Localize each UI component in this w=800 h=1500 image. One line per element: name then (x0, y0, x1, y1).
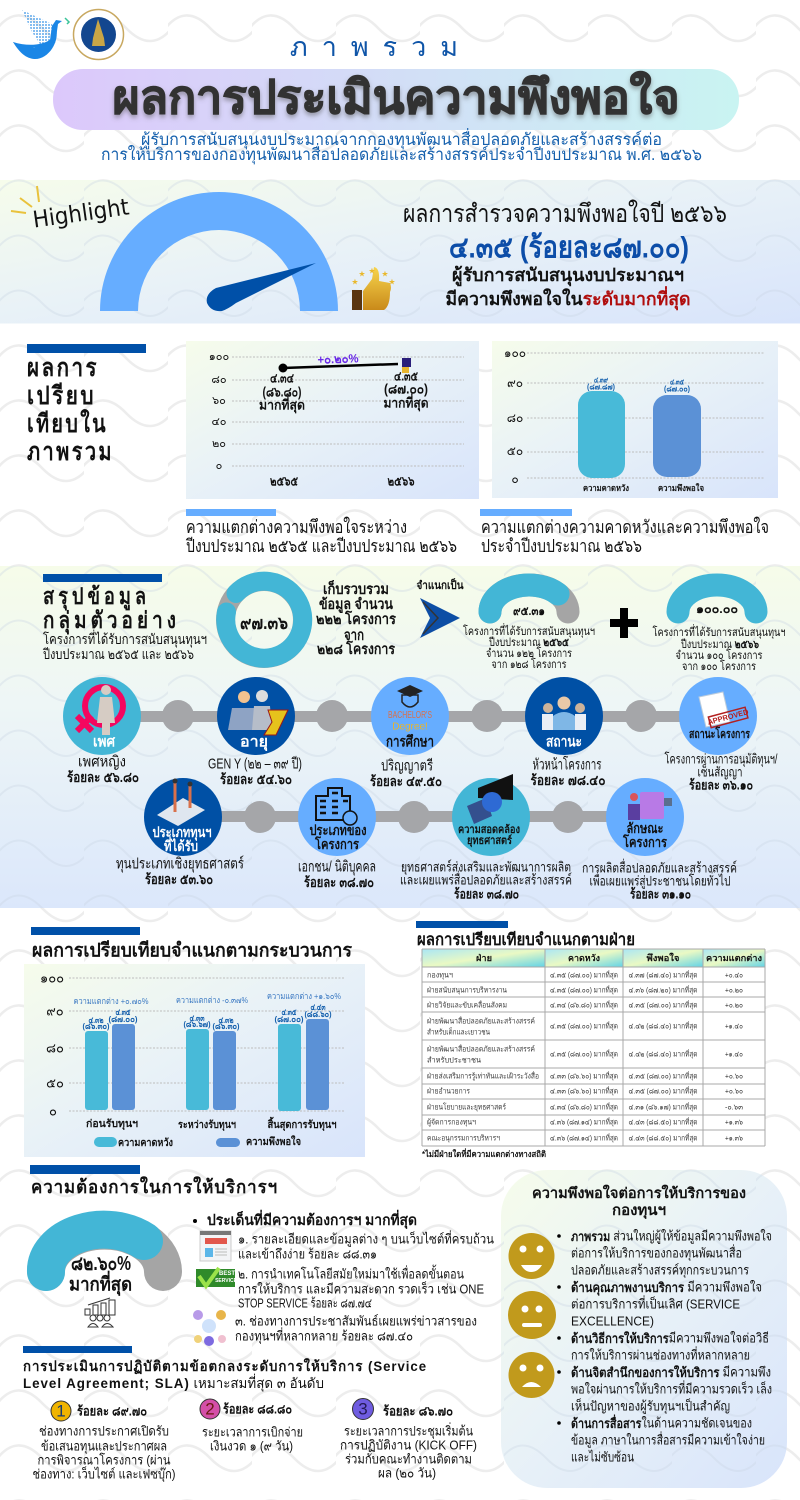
list: most needed issues: ประเด็นที่มีความต้องการฯ มากที่สุด (207, 1209, 417, 1229)
circle: project type: โครงการ (314, 835, 359, 852)
text: need 2 (238, 1264, 484, 1310)
bar chart: expectation vs satisfaction: (๘๗.๘๗) (587, 382, 615, 392)
table: by division: ความแตกต่าง (706, 953, 762, 963)
text: fiscal 2565: จำนวน ๑๒๒ โครงการ (486, 646, 572, 660)
list: service method (557, 1330, 769, 1362)
table: by division: ฝ่ายส่งเสริมการรู้เท่าทันและเฝ้าระวังสื่อ (427, 1070, 539, 1080)
table: by division: +๐.๒๐ (725, 986, 743, 994)
circle: project nature: ลักษณะ (626, 820, 664, 836)
table: by division: ฝ่าย (476, 953, 492, 963)
bar chart: by process: ๔.๔๓ (310, 1002, 326, 1012)
bar chart: expectation vs satisfaction: ๔.๓๙ (594, 376, 608, 384)
line chart: year comparison: ๐ (216, 460, 222, 472)
caption: expectation difference (480, 509, 769, 556)
circle: status: สถานะ (546, 734, 582, 750)
table: by division: ๔.๔๓ (๘๘.๕๐) มากที่สุด (628, 1132, 698, 1142)
line chart: year comparison: ๑๐๐ (209, 351, 229, 363)
footnote: *ไม่มีฝ่ายใดที่มีความแตกต่างทางสถิติ (422, 1147, 546, 1159)
bar chart: expectation vs satisfaction: ๑๐๐ (504, 346, 526, 360)
bar chart: by process: ๙๐ (46, 1004, 64, 1018)
table: by division: คณะอนุกรรมการบริหารฯ (427, 1134, 500, 1142)
icon: best service: SERVICE (215, 1278, 238, 1284)
list: service method: การให้บริการผ่านช่องทางที่หลากหลาย (571, 1346, 750, 1362)
text: need 3 (235, 1314, 477, 1344)
table: by division: ๔.๓๕ (๘๗.๐๐) มากที่สุด (628, 1070, 698, 1080)
line chart: year comparison: ๒๐ (212, 438, 226, 450)
list: service method: ด้านวิธีการให้บริการมีความพึงพอใจต่อวิธี (571, 1330, 769, 1346)
bar chart: expectation vs satisfaction: ความพึงพอใจ (658, 483, 704, 493)
list: service quality: EXCELLENCE) (571, 1314, 654, 1328)
result: project status: เซ็นสัญญา (698, 762, 742, 780)
donut: response rate: ๙๗.๓๖ (240, 613, 288, 633)
circle: project nature: โครงการ (622, 833, 667, 850)
result: project type: ร้อยละ ๓๘.๗๐ (304, 874, 374, 890)
text: sample count: ข้อมูล จำนวน (319, 596, 393, 613)
list: communication: และไม่ซับซ้อน (571, 1450, 634, 1464)
text: fiscal 2566: จาก ๑๐๐ โครงการ (682, 659, 756, 673)
bar chart: expectation vs satisfaction: ๘๐ (507, 411, 523, 425)
circle: strategy alignment: ยุทธศาสตร์ (467, 834, 512, 848)
line chart: year comparison: ๖๐ (212, 395, 226, 407)
legend (94, 1134, 301, 1149)
result: status (530, 756, 606, 788)
result: project type: เอกชน/ นิติบุคคล (298, 858, 376, 876)
table: by division: ๔.๔๓ (๘๘.๕๐) มากที่สุด (628, 1116, 698, 1126)
bar chart: by process: (๘๗.๐๐) (108, 1014, 138, 1024)
main title banner: ผลการประเมินความพึงพอใจ (112, 70, 680, 123)
table: by division: ฝ่ายพัฒนาสื่อปลอดภัยและสร้างสรรค์ (427, 1016, 535, 1026)
heading: sample summary: ปีงบประมาณ ๒๕๖๕ และ ๒๕๖๖ (43, 646, 194, 662)
circle: grant type (144, 778, 222, 856)
icon: best service: BEST (219, 1271, 235, 1277)
gauge: service needs: มากที่สุด (69, 1270, 132, 1296)
bar chart: by process: (๘๘.๖๐) (304, 1009, 332, 1019)
table: by division: +๐.๒๐ (725, 1000, 743, 1010)
bar chart: by process: (๘๖.๓๐) (82, 1021, 110, 1031)
SLA rank 1: ข้อเสนอทุนและประกาศผล (41, 1438, 167, 1454)
list: service mind (557, 1364, 772, 1414)
table: by division: ๔.๓๕ (๘๗.๐๐) มากที่สุด (628, 1000, 698, 1010)
subtitle: ผู้รับการสนับสนุนงบประมาณจากกองทุนพัฒนาสื่อปลอดภัยและสร้างสรรค์ต่อ (141, 128, 662, 150)
circle: education: Degree! (392, 722, 428, 732)
text: sample count: ๒๒๘ โครงการ (317, 640, 395, 658)
icon: communication network (193, 1310, 226, 1346)
highlight label: Highlight (31, 194, 131, 234)
table: by division: ๔.๓๕ (๘๗.๐๐) มากที่สุด (550, 984, 618, 994)
circle: status (525, 677, 603, 755)
circle: project nature (606, 778, 684, 856)
heading: overall comparison: เปรียบ (27, 382, 96, 410)
circle: strategy alignment (452, 774, 530, 856)
timeline row 1 (63, 677, 757, 755)
SLA rank 2 (200, 1399, 303, 1454)
result: grant type (116, 856, 244, 887)
result: gender: เพศหญิง (78, 754, 126, 770)
SLA rank 3: การปฏิบัติงาน (KICK OFF) (340, 1438, 477, 1452)
table: by division: ฝ่ายพัฒนาสื่อปลอดภัยและสร้างสรรค์ (427, 1044, 535, 1054)
title: overview: ภาพรวม (290, 32, 472, 62)
table: by division: ๔.๓๔ (๘๖.๘๐) มากที่สุด (550, 1102, 618, 1112)
result: project type (298, 858, 376, 890)
table: by division: กองทุนฯ (427, 970, 453, 980)
arrow: breakdown: จำแนกเป็น (416, 578, 464, 592)
list: service mind: เห็นปัญหาของผู้รับทุนฯเป็นสำคัญ (571, 1396, 730, 1414)
result: age: GEN Y (๒๒ – ๓๙ ปี) (208, 756, 302, 772)
SLA rank 3: ผล (๒๐ วัน) (378, 1466, 436, 1480)
list: overall: ภาพรวม ส่วนใหญ่ผู้ให้ข้อมูลมีความพึงพอใจ (571, 1228, 772, 1244)
icon: website (200, 1231, 231, 1261)
bar chart: by process: ระหว่างรับทุนฯ (178, 1119, 236, 1132)
bar chart: by process: ๔.๓๒ (88, 1015, 104, 1025)
bar chart: by process: ๔.๓๕ (116, 1007, 131, 1017)
bar chart: by process: ๔.๓๓ (190, 1013, 205, 1023)
heading: SLA: การประเมินการปฏิบัติตามข้อตกลงระดับการให้บริการ (Service (23, 1357, 427, 1375)
result: strategy: ร้อยละ ๓๘.๗๐ (454, 886, 519, 902)
gauge: fiscal 2565 (490, 585, 568, 618)
text: sample count (316, 579, 396, 658)
SLA rank 1: ช่องทาง: เว็บไซต์ และเฟซบุ๊ก) (32, 1464, 176, 1482)
heading: service needs: ความต้องการในการให้บริการฯ (31, 1176, 278, 1197)
table: by division: คาดหวัง (568, 953, 600, 963)
circle: strategy alignment: ความสอดคล้อง (458, 823, 520, 836)
table: by division: +๑.๔๐ (725, 1022, 743, 1030)
icon: thumbs up with stars: ★ (388, 278, 396, 286)
table: by division: +๐.๖๐ (725, 1072, 743, 1080)
table: by division: พึงพอใจ (646, 952, 680, 963)
result: gender (67, 754, 139, 785)
result: education: ปริญญาตรี (381, 758, 433, 774)
SLA rank 2: 2 (205, 1400, 215, 1418)
gauge: fiscal 2565: ๙๕.๓๑ (513, 604, 545, 618)
text: need 1: และเข้าถึงง่าย ร้อยละ ๘๘.๓๑ (238, 1246, 377, 1262)
line chart: year comparison: ๘๐ (211, 374, 227, 386)
bar chart: by process: สิ้นสุดการรับทุนฯ (267, 1116, 337, 1132)
bar chart: expectation vs satisfaction (492, 341, 778, 498)
circle: grant type: ประเภททุนฯ (152, 824, 212, 841)
table: by division: +๑.๓๖ (725, 1118, 743, 1126)
SLA rank 3: 3 (358, 1400, 368, 1418)
table: by division: ๔.๓๓ (๘๖.๖๐) มากที่สุด (550, 1070, 618, 1080)
main title banner (53, 69, 739, 130)
text: fiscal 2565 (463, 623, 595, 671)
circle: education (371, 677, 449, 755)
circle: gender (63, 677, 141, 755)
bar chart: by process (24, 964, 365, 1157)
heading: overall comparison (27, 344, 146, 466)
table: by division: ๔.๓๖ (๘๗.๑๔) มากที่สุด (550, 1132, 618, 1142)
bar chart: expectation vs satisfaction: ๕๐ (507, 444, 523, 458)
legend: ความพึงพอใจ (246, 1134, 301, 1148)
heading: overall comparison: ภาพรวม (27, 438, 114, 466)
bar chart: by process: ก่อนรับทุนฯ (86, 1118, 138, 1131)
legend: ความคาดหวัง (118, 1137, 173, 1149)
bar chart: by process: ความแตกต่าง +๑.๖๐% (267, 991, 341, 1001)
result: project nature: เพื่อเผยแพร่สู่ประชาชนโดยทั่วไป (590, 872, 730, 890)
gauge: fiscal 2566: ๑๐๐.๐๐ (696, 602, 738, 616)
heading: SLA (23, 1346, 427, 1392)
line chart: year comparison: ๔๐ (211, 416, 227, 428)
line chart: year comparison: ๔.๓๕ (394, 368, 418, 384)
bar chart: by process: (๘๗.๐๐) (274, 1014, 304, 1024)
text: fiscal 2566: จำนวน ๑๐๐ โครงการ (676, 648, 762, 662)
bar chart: by process: (๘๖.๖๗) (184, 1019, 211, 1029)
heading: sample summary (43, 574, 207, 662)
icon: thumbs up with stars: ★ (351, 278, 359, 286)
bar chart: expectation vs satisfaction: ๙๐ (507, 376, 523, 390)
donut: response rate (226, 581, 303, 658)
line chart: year comparison: ๔.๓๔ (270, 370, 294, 386)
table: by division: ฝ่ายวิจัยและขับเคลื่อนสังคม (427, 1000, 507, 1010)
heading: by division (416, 921, 635, 949)
text: fiscal 2565: จาก ๑๒๘ โครงการ (492, 657, 566, 671)
icon: happy face (508, 1233, 554, 1279)
icon: sad face (508, 1352, 554, 1398)
SLA rank 2: เงินงวด ๑ (๙ วัน) (210, 1438, 293, 1454)
heading: sample summary: กลุ่มตัวอย่าง (43, 607, 180, 635)
bar chart: by process: ความแตกต่าง -๐.๓๗% (176, 995, 248, 1005)
table: by division: +๐.๔๐ (725, 970, 743, 980)
icon: plus (610, 608, 638, 638)
satisfaction result text: ๔.๓๕ (ร้อยละ๘๗.๐๐) (449, 232, 689, 264)
subtitle: การให้บริการของกองทุนพัฒนาสื่อปลอดภัยและสร้างสรรค์ประจำปีงบประมาณ พ.ศ. ๒๕๖๖ (101, 143, 702, 165)
text: need 2: STOP SERVICE ร้อยละ ๘๗.๗๔ (238, 1296, 372, 1310)
bar chart: by process: ๕๐ (46, 1076, 64, 1090)
bar chart: by process: (๘๖.๓๐) (212, 1021, 240, 1031)
list: overall: ปลอดภัยและสร้างสรรค์ทุกกระบวนการ (571, 1262, 749, 1278)
table: by division: +๑.๓๖ (725, 1134, 743, 1142)
SLA rank 1: ร้อยละ ๘๙.๗๐ (77, 1404, 147, 1418)
heading: overall comparison: เทียบใน (27, 408, 108, 438)
line chart: year comparison: (๘๗.๐๐) (384, 382, 428, 396)
arrow: breakdown (416, 578, 464, 638)
list: service quality: ต่อการบริการที่เป็นเลิศ (SERVICE (571, 1294, 740, 1312)
SLA rank 2: ร้อยละ ๘๘.๘๐ (223, 1402, 292, 1416)
caption: year difference (186, 509, 457, 556)
bar chart: expectation vs satisfaction: ๐ (511, 472, 519, 486)
list: service mind: ด้านจิตสำนึกของการให้บริการ มีความพึง (571, 1364, 771, 1380)
line chart: year comparison: ๒๕๖๖ (388, 474, 414, 488)
SLA rank 1 (32, 1401, 176, 1482)
text: fiscal 2566 (652, 624, 786, 673)
result: age: ร้อยละ ๕๔.๖๐ (220, 771, 292, 787)
satisfaction result text: ผู้รับการสนับสนุนงบประมาณฯ (452, 265, 684, 287)
heading: by process (31, 927, 353, 962)
caption: expectation difference: ประจำปีงบประมาณ ๒๕๖๖ (481, 536, 642, 556)
caption: year difference: ปีงบประมาณ ๒๕๖๕ และปีงบประมาณ ๒๕๖๖ (186, 536, 457, 556)
heading: overall comparison: ผลการ (27, 354, 99, 382)
text: need 3: ๓. ช่องทางการประชาสัมพันธ์เผยแพร่ข่าวสารของ (235, 1314, 477, 1328)
text: need 1: ๑. รายละเอียดและข้อมูลต่าง ๆ บนเว็บไซต์ที่ครบถ้วน (238, 1230, 494, 1248)
result: strategy: ยุทธศาสตร์ส่งเสริมและพัฒนาการผลิต (401, 858, 571, 876)
panel: satisfaction with services (501, 1170, 787, 1488)
line chart: year comparison: ๒๕๖๕ (270, 474, 298, 488)
result: status: หัวหน้าโครงการ (532, 756, 602, 774)
result: age (208, 756, 302, 787)
panel heading (532, 1184, 746, 1219)
circle: age: อายุ (240, 734, 268, 752)
table: by division: สำหรับเด็กและเยาวชน (427, 1026, 490, 1036)
text: need 3: กองทุนฯที่หลากหลาย ร้อยละ ๘๗.๔๐ (235, 1328, 413, 1344)
heading: by division: ผลการเปรียบเทียบจำแนกตามฝ่าย (417, 930, 635, 949)
SLA rank 3: ระยะเวลาการประชุมเริ่มต้น (344, 1422, 473, 1440)
gauge: fiscal 2566 (678, 585, 756, 616)
result: grant type: ทุนประเภทเชิงยุทธศาสตร์ (116, 856, 244, 874)
circle: project status: สถานะโครงการ (689, 726, 750, 741)
table: by division: ๔.๓๑ (๘๖.๑๗) มากที่สุด (628, 1102, 698, 1112)
line chart: year comparison: +๐.๒๐% (317, 351, 359, 367)
line chart: year comparison (186, 341, 479, 499)
table: by division: ๔.๓๕ (๘๗.๐๐) มากที่สุด (550, 970, 618, 980)
table: by division: ๔.๓๗ (๘๗.๔๐) มากที่สุด (628, 970, 698, 980)
line chart: year comparison: มากที่สุด (384, 392, 428, 412)
circle: age (217, 677, 295, 755)
bar chart: expectation vs satisfaction: ๔.๓๕ (670, 378, 684, 386)
SLA rank 1: 1 (56, 1402, 66, 1420)
result: education: ร้อยละ ๔๙.๕๐ (370, 773, 442, 789)
result: project status (664, 750, 778, 792)
timeline row 2 (144, 774, 684, 856)
bar chart: by process: ๔.๓๒ (218, 1015, 234, 1025)
subtitle (101, 128, 702, 165)
highlight label (11, 186, 131, 234)
gauge (100, 192, 338, 311)
result: strategy: และเผยแพร่สื่อปลอดภัยและสร้างสรรค์ (400, 870, 572, 888)
icon: best service (196, 1268, 238, 1287)
result: status: ร้อยละ ๗๘.๔๐ (530, 772, 606, 788)
heading: SLA: Level Agreement; SLA) เหมาะสมที่สุด ๓ อันดับ (23, 1374, 324, 1392)
circle: gender: เพศ (93, 734, 115, 750)
circle: grant type: ที่ได้รับ (164, 836, 198, 854)
SLA rank 3: ร่วมกับคณะทำงานติดตาม (345, 1452, 472, 1466)
circle: project type (298, 778, 376, 856)
icon: thumbs up with stars: ★ (368, 266, 376, 276)
satisfaction result text: มีความพึงพอใจในระดับมากที่สุด (446, 286, 690, 311)
icon: neutral face (508, 1291, 556, 1339)
text: sample count: ๒๒๒ โครงการ (316, 610, 396, 628)
bar chart: by process: ความแตกต่าง +๐.๗๐% (74, 996, 149, 1006)
result: education (370, 758, 442, 789)
circle: project status (679, 677, 757, 755)
table: by division: ๔.๔๒ (๘๘.๔๐) มากที่สุด (628, 1020, 698, 1030)
result: project nature: การผลิตสื่อปลอดภัยและสร้างสรรค์ (582, 858, 737, 876)
list: communication: ด้านการสื่อสารในด้านความชัดเจนของ (571, 1414, 752, 1430)
bar chart: by process: ๑๐๐ (40, 970, 64, 986)
table: by division: สำหรับประชาชน (427, 1056, 481, 1064)
satisfaction result text: ผลการสำรวจความพึงพอใจปี ๒๕๖๖ (403, 199, 727, 228)
gauge: service needs: ๘๒.๖๐% (71, 1253, 131, 1275)
heading: service needs (30, 1165, 278, 1197)
table: by division: ๔.๓๖ (๘๗.๑๔) มากที่สุด (550, 1116, 618, 1126)
bar chart: by process: ๔.๓๕ (282, 1007, 297, 1017)
text: need 1 (238, 1230, 494, 1262)
table: by division: ๔.๓๔ (๘๖.๘๐) มากที่สุด (550, 1000, 618, 1010)
heading: sample summary: โครงการที่ได้รับการสนับสนุนทุนฯ (43, 630, 207, 648)
result: strategy (400, 858, 572, 902)
heading: sample summary: สรุปข้อมูล (43, 583, 150, 611)
table: by division: +๐.๖๐ (725, 1086, 743, 1096)
text: fiscal 2566: ปีงบประมาณ ๒๕๖๖ (680, 638, 759, 651)
table: by division (422, 949, 765, 1146)
table: by division: ๔.๓๕ (๘๗.๐๐) มากที่สุด (550, 1048, 618, 1058)
circle: education: การศึกษา (386, 732, 434, 750)
logo: university seal (74, 10, 124, 60)
text: fiscal 2565: โครงการที่ได้รับการสนับสนุนทุนฯ (463, 623, 595, 638)
text: sample count: จาก (344, 628, 364, 644)
table: by division: ๔.๓๕ (๘๗.๐๐) มากที่สุด (550, 1020, 618, 1030)
table: by division: ฝ่ายสนับสนุนการบริหารงาน (427, 986, 507, 994)
table: by division: ฝ่ายนโยบายและยุทธศาสตร์ (427, 1102, 506, 1112)
satisfaction result text (403, 199, 727, 311)
table: by division: -๐.๖๓ (725, 1102, 743, 1112)
logo: dove (13, 10, 69, 59)
bar chart: by process: ๐ (49, 1104, 57, 1118)
text: sample count: เก็บรวบรวม (323, 579, 389, 598)
result: gender: ร้อยละ ๕๖.๘๐ (67, 769, 139, 785)
icon: thumbs up with stars: ★ (358, 270, 366, 278)
bar chart: expectation vs satisfaction: ความคาดหวัง (583, 483, 629, 493)
list: service quality (557, 1280, 762, 1328)
table: by division: ฝ่ายอำนวยการ (427, 1086, 470, 1096)
panel: sample summary (0, 566, 800, 908)
circle: education: BACHELOR'S (388, 709, 432, 721)
text: fiscal 2565: ปีงบประมาณ ๒๕๖๕ (488, 636, 569, 649)
circle: project type: ประเภทของ (310, 822, 367, 838)
list: communication (557, 1414, 765, 1464)
SLA rank 1: ช่องทางการประกาศเปิดรับ (39, 1424, 169, 1438)
SLA rank 2: ระยะเวลาการเบิกจ่าย (202, 1424, 303, 1440)
line chart: year comparison: มากที่สุด (259, 394, 305, 414)
table: by division: ๔.๓๖ (๘๗.๒๐) มากที่สุด (628, 984, 698, 994)
SLA rank 1: การพิจารณาโครงการ (ผ่าน (38, 1452, 171, 1468)
SLA rank 3: ร้อยละ ๘๖.๗๐ (383, 1404, 453, 1418)
table: by division: ๔.๔๒ (๘๘.๔๐) มากที่สุด (628, 1048, 698, 1058)
table: by division: ๔.๓๕ (๘๗.๐๐) มากที่สุด (628, 1086, 698, 1096)
list: service quality: ด้านคุณภาพงานบริการ มีความพึงพอใจ (571, 1280, 762, 1296)
gauge: service needs (46, 1230, 163, 1296)
bar chart: by process: ๘๐ (46, 1040, 64, 1056)
table: by division: ๔.๓๓ (๘๖.๖๐) มากที่สุด (550, 1086, 618, 1096)
panel heading: กองทุนฯ (612, 1203, 666, 1219)
result: grant type: ร้อยละ ๕๓.๖๐ (145, 871, 213, 887)
result: project nature: ร้อยละ ๓๑.๑๐ (630, 886, 691, 902)
icon: people and growth (85, 1298, 115, 1327)
list: overall: ต่อการให้บริการของกองทุนพัฒนาสื่อ (571, 1244, 742, 1262)
list: overall (557, 1228, 772, 1278)
bar chart: expectation vs satisfaction: (๘๗.๐๐) (664, 384, 690, 394)
text: need 2: ๒. การนำเทคโนโลยีสมัยใหม่มาใช้เพื่อลดขั้นตอน (238, 1264, 464, 1282)
table: by division: ผู้จัดการกองทุนฯ (427, 1118, 476, 1126)
result: project status: ร้อยละ ๓๖.๑๐ (689, 778, 753, 792)
panel: highlight (0, 180, 800, 324)
table: by division: +๑.๔๐ (725, 1050, 743, 1058)
text: need 2: การให้บริการ และมีความสะดวก รวดเร็ว เช่น ONE (238, 1280, 484, 1296)
icon: thumbs up with stars: ★ (381, 270, 389, 278)
SLA rank 3 (340, 1398, 477, 1480)
circle: project status: APPROVED (707, 707, 750, 727)
icon: thumbs up with stars (351, 266, 396, 310)
caption: year difference: ความแตกต่างความพึงพอใจระหว่าง (186, 516, 407, 537)
result: project nature (582, 858, 737, 902)
heading: by process: ผลการเปรียบเทียบจำแนกตามกระบวนการ (32, 940, 353, 962)
line chart: year comparison: (๘๖.๘๐) (262, 384, 302, 400)
panel heading: ความพึงพอใจต่อการให้บริการของ (532, 1184, 746, 1202)
